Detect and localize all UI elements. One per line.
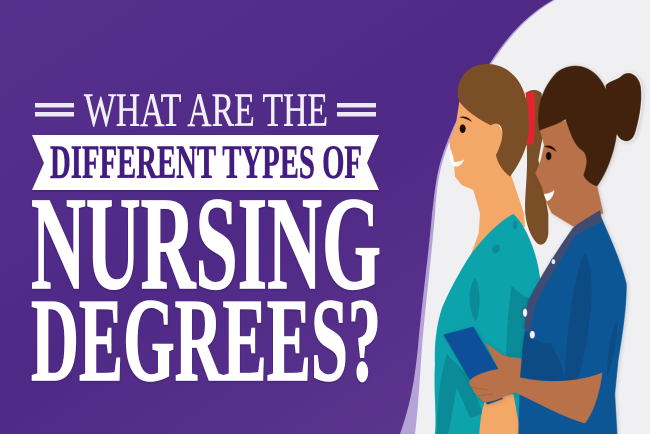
forearm [479,394,521,434]
skin: face and neck [535,120,603,227]
smile [450,150,464,167]
eyebrow and eye [459,117,472,133]
teal scrub top [435,214,547,434]
skin: face and neck [449,102,525,257]
title [31,84,381,406]
nurse in teal scrubs [435,64,548,434]
scrub shading [521,252,617,382]
stethoscope buttons [522,259,556,339]
heading line: what are the: WHAT ARE THE [84,84,328,137]
heading line: nursing: NURSING [31,169,381,317]
smile [544,190,554,201]
ribbon banner: different types of: DIFFERENT TYPES OF [50,136,362,189]
nurse in blue scrubs [443,66,642,434]
blue scrub top [518,214,627,434]
ribbon banner: different types of [32,135,379,190]
heading line: degrees: DEGREES? [31,274,381,406]
hair [458,64,529,177]
red hair tie [525,92,535,145]
fingers [472,387,493,396]
bun [605,73,642,142]
tablet [443,327,503,405]
hair [538,66,617,186]
arm and hand [469,342,602,423]
lavender curve band [400,0,650,434]
illustration: two nurses [435,64,642,434]
white curved panel [415,0,650,434]
stethoscope tubing [524,210,602,331]
ponytail [525,90,548,245]
scrub shading [437,221,533,434]
eyebrow and eye [544,146,557,160]
